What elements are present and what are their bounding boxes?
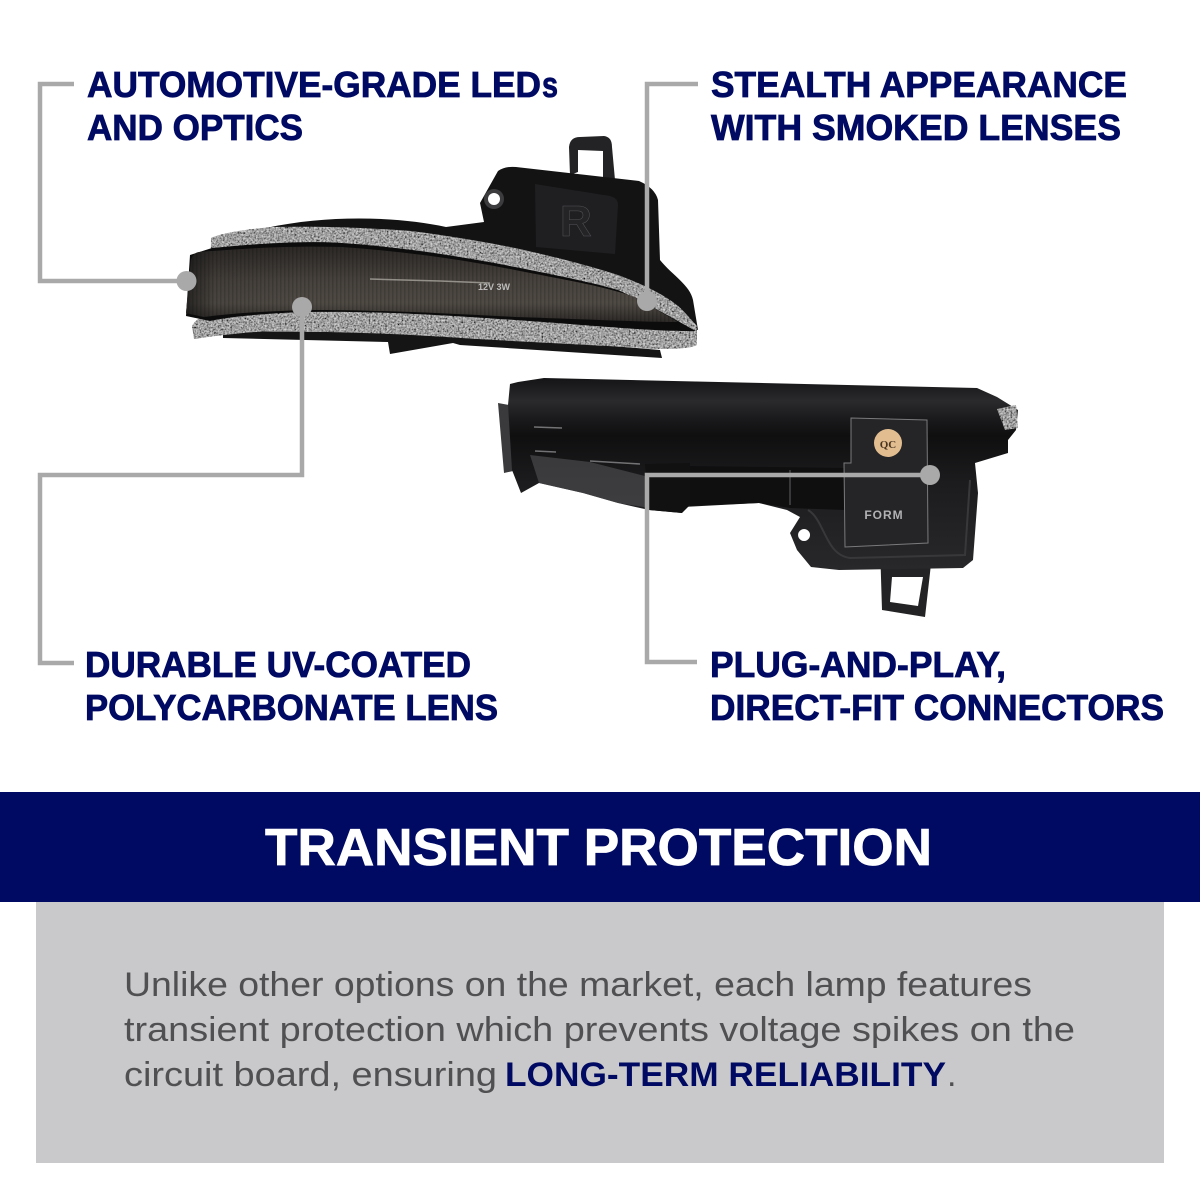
lens seal shadow: [186, 242, 696, 331]
body text: transient protection which prevents voltage spikes on the: [124, 1011, 1075, 1049]
body text: .: [947, 1056, 956, 1094]
lens ribs: [186, 247, 678, 322]
connector panel with R marking: R: [560, 197, 592, 246]
body text: [124, 966, 1075, 1094]
lower mounting tab: [880, 545, 933, 617]
rear housing: [266, 167, 698, 330]
foam gasket: [192, 227, 697, 349]
heading: plug-and-play connectors: [710, 644, 1164, 728]
foam end: [997, 405, 1018, 430]
heading: automotive-grade LEDs and optics: AND OPTICS: [87, 107, 303, 148]
heading: plug-and-play connectors: DIRECT-FIT CONNECTORS: [710, 687, 1164, 728]
body text: LONG-TERM RELIABILITY: [505, 1056, 946, 1094]
heading: stealth appearance: STEALTH APPEARANCE: [711, 64, 1127, 105]
grey sheen: [530, 455, 650, 508]
lower fin: [223, 331, 662, 358]
housing highlights: [534, 427, 640, 464]
connector notch: [645, 463, 690, 513]
left end cap: [498, 403, 518, 473]
heading: stealth appearance: WITH SMOKED LENSES: [711, 107, 1121, 148]
module contour lines: [790, 470, 970, 558]
banner: transient protection: TRANSIENT PROTECTION: [265, 819, 932, 877]
callout: connectors leader: [647, 465, 940, 662]
product photo: upper mirror lamp, lens side: [186, 136, 698, 358]
callout: UV-coated lens leader: [40, 297, 312, 663]
product photo: lower mirror lamp, connector side: [498, 378, 1018, 617]
heading: durable UV-coated lens: DURABLE UV-COATED: [85, 644, 471, 685]
panel: description: [36, 902, 1164, 1163]
connector panel with R marking: [535, 184, 618, 254]
lower housing: [508, 378, 1018, 570]
callout: stealth appearance leader: [637, 84, 698, 311]
heading: automotive-grade LEDs and optics: s: [542, 64, 558, 105]
heading: plug-and-play connectors: PLUG-AND-PLAY,: [710, 644, 1006, 685]
FORM marking: FORM: [864, 508, 904, 522]
banner: transient protection: [0, 792, 1200, 902]
heading: durable UV-coated lens: POLYCARBONATE LENS: [85, 687, 498, 728]
mounting tab: [569, 136, 615, 180]
callout: automotive-grade LEDs leader: [40, 84, 196, 291]
heading: automotive-grade LEDs and optics: [87, 64, 558, 148]
connector channel: [690, 466, 845, 510]
heading: durable UV-coated lens: [85, 644, 498, 728]
heading: stealth appearance: [711, 64, 1127, 148]
QC sticker: QC: [880, 439, 896, 451]
circuit module: [844, 418, 928, 547]
mounting hole: [484, 189, 504, 209]
body text: circuit board, ensuring: [124, 1056, 497, 1094]
smoked lens: [186, 247, 678, 322]
heading: automotive-grade LEDs and optics: AUTOMOTIVE-GRADE LED: [87, 64, 541, 105]
lens marking: 12V 3W: [478, 282, 511, 292]
body text: Unlike other options on the market, each lamp features: [124, 966, 1032, 1004]
